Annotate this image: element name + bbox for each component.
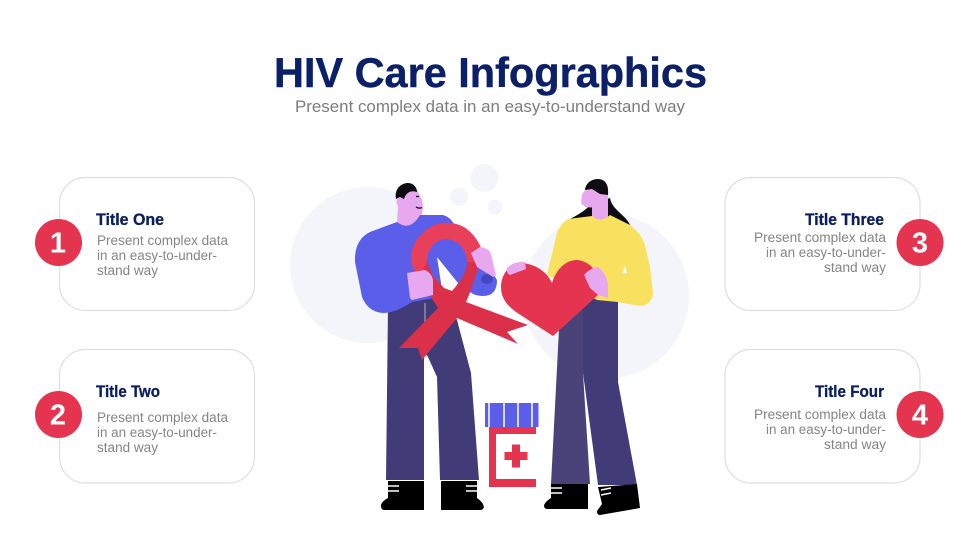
- background circles and bubbles: [290, 164, 689, 379]
- panel: title two: [35, 350, 254, 483]
- cuff shadow: [481, 274, 493, 284]
- badge 4: [896, 391, 944, 438]
- man trousers: [386, 295, 479, 480]
- text block: title one: in an easy-to-under-: [97, 248, 217, 263]
- woman shoes: [544, 484, 640, 515]
- badge 3: [896, 219, 944, 266]
- text block: title three: stand way: [824, 260, 886, 275]
- man shoes: [381, 481, 484, 510]
- heart: [501, 260, 599, 336]
- woman back hair: [568, 198, 630, 225]
- icon: medicine bottle: [485, 403, 538, 487]
- badge 1: [35, 219, 82, 266]
- woman sweater: [547, 215, 653, 306]
- woman hands: [507, 262, 608, 298]
- text block: title one: stand way: [97, 263, 158, 278]
- woman trousers: [583, 298, 637, 485]
- illustration: woman: [501, 179, 653, 515]
- heading: title three: Title Three: [805, 211, 884, 229]
- panel: title one: [35, 178, 254, 310]
- man sweater: [355, 215, 497, 313]
- text block: title one: Present complex data: [97, 233, 228, 248]
- text block: title four: in an easy-to-under-: [766, 422, 886, 437]
- text block: title four: [754, 407, 886, 452]
- white gap in loop: [437, 257, 458, 296]
- ribbon: [399, 223, 528, 360]
- heading: title two: Title Two: [96, 383, 160, 401]
- man hands: [407, 247, 496, 300]
- man neck and head: [396, 183, 423, 228]
- text block: title two: in an easy-to-under-: [97, 425, 217, 440]
- text block: title one: [97, 233, 228, 278]
- title: HIV Care Infographics: [274, 49, 707, 96]
- subtitle: Present complex data in an easy-to-understand way: [295, 97, 685, 116]
- text block: title two: Present complex data: [97, 410, 228, 425]
- text block: title two: stand way: [97, 440, 158, 455]
- heading: title four: Title Four: [815, 383, 885, 401]
- badge 1: 1: [50, 228, 66, 260]
- text block: title three: in an easy-to-under-: [766, 245, 886, 260]
- text block: title two: [97, 410, 228, 455]
- woman top hair: [585, 179, 608, 195]
- badge 3: 3: [912, 228, 928, 260]
- text block: title four: stand way: [824, 437, 886, 452]
- panel: title four: [725, 350, 944, 483]
- illustration: man: [355, 183, 528, 510]
- badge 4: 4: [912, 400, 928, 432]
- text block: title three: Present complex data: [754, 230, 886, 245]
- badge 2: [35, 391, 82, 438]
- text block: title four: Present complex data: [754, 407, 886, 422]
- badge 2: 2: [50, 400, 66, 432]
- woman neck and face: [581, 188, 608, 222]
- heading: title one: Title One: [96, 211, 164, 229]
- panel: title three: [725, 178, 944, 310]
- text block: title three: [754, 230, 886, 275]
